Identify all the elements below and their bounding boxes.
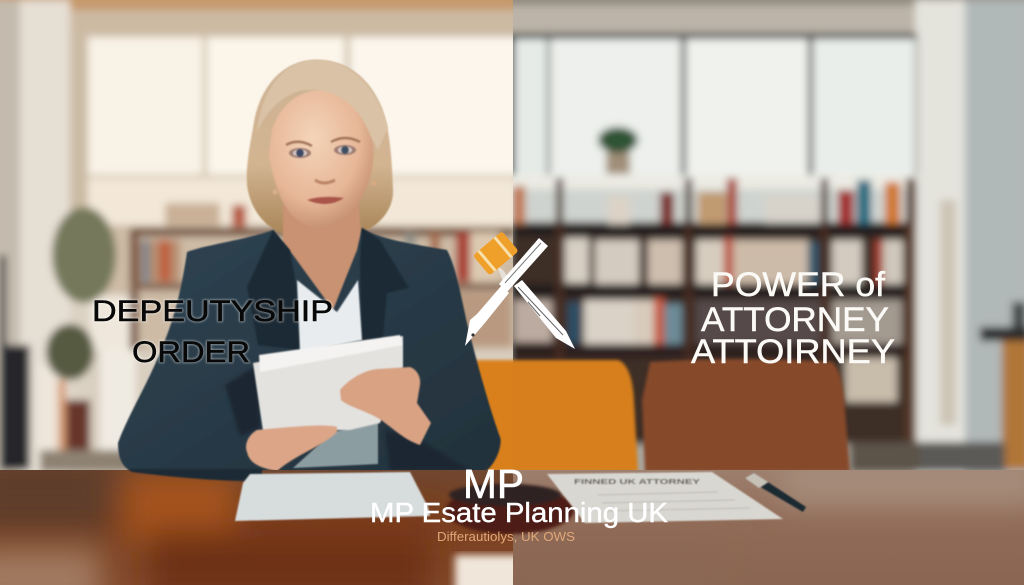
neck (283, 195, 362, 310)
table: left half (0, 470, 513, 585)
brand: MP Estate Planning UK: MP (463, 461, 524, 507)
second pencil (514, 280, 575, 349)
pen (499, 238, 548, 292)
chair: orange (505, 360, 638, 472)
document: power of attorney form: FINNED UK ATTORNEY (574, 479, 701, 486)
heading: DEPEUTYSHIP ORDER (92, 295, 333, 369)
sheets of paper (253, 335, 403, 431)
person: woman in dark blazer holding papers (118, 60, 501, 472)
document: power of attorney form (547, 472, 783, 523)
blazer (118, 228, 501, 472)
heading: DEPEUTYSHIP ORDER: DEPEUTYSHIP (92, 295, 333, 328)
heading: DEPEUTYSHIP ORDER: DEPEUTYSHIP (92, 295, 333, 328)
document: paper on left of table (235, 472, 430, 521)
hair front lock (257, 60, 388, 150)
face (269, 90, 373, 228)
heading: DEPEUTYSHIP ORDER: ORDER (132, 336, 250, 369)
right lapel (360, 228, 409, 345)
blazer lapels (247, 230, 300, 350)
brand: MP Estate Planning UK: Differautiolys, UK OWS (437, 529, 575, 544)
icon: gavel and pen crossed (465, 231, 575, 349)
pen nib (465, 285, 509, 346)
chair: brown (642, 359, 850, 472)
sleeve shading (225, 365, 470, 470)
gavel head (473, 231, 519, 276)
gavel handle stub (497, 266, 510, 284)
heading: POWER of ATTORNEY ATTOIRNEY: ATTORNEY (701, 301, 889, 339)
sleeve elbow resting on table (127, 469, 262, 481)
lower shirt (293, 422, 378, 468)
table shading: left (0, 470, 513, 585)
eyes, brows, nose and mouth (272, 138, 376, 204)
background: left warm office (0, 0, 520, 480)
heading: DEPEUTYSHIP ORDER: ORDER (132, 336, 250, 369)
right hand (340, 367, 431, 445)
heading: POWER of ATTORNEY ATTOIRNEY: POWER of (711, 266, 886, 304)
background: right cool office (505, 0, 1024, 480)
brand: MP Estate Planning UK: MP Esate Planning UK (370, 497, 668, 528)
table: right half (513, 470, 1024, 585)
heading: POWER of ATTORNEY ATTOIRNEY: ATTOIRNEY (691, 333, 895, 371)
dark cup on table (446, 484, 574, 534)
heading: POWER of ATTORNEY ATTOIRNEY (691, 266, 895, 371)
brand: MP Estate Planning UK (370, 461, 668, 544)
hair (247, 60, 393, 234)
pen on table (745, 473, 806, 512)
chair: orange, left half (476, 358, 513, 470)
white shirt (297, 280, 362, 352)
left hand (246, 426, 337, 471)
table shading: right (778, 470, 1024, 515)
